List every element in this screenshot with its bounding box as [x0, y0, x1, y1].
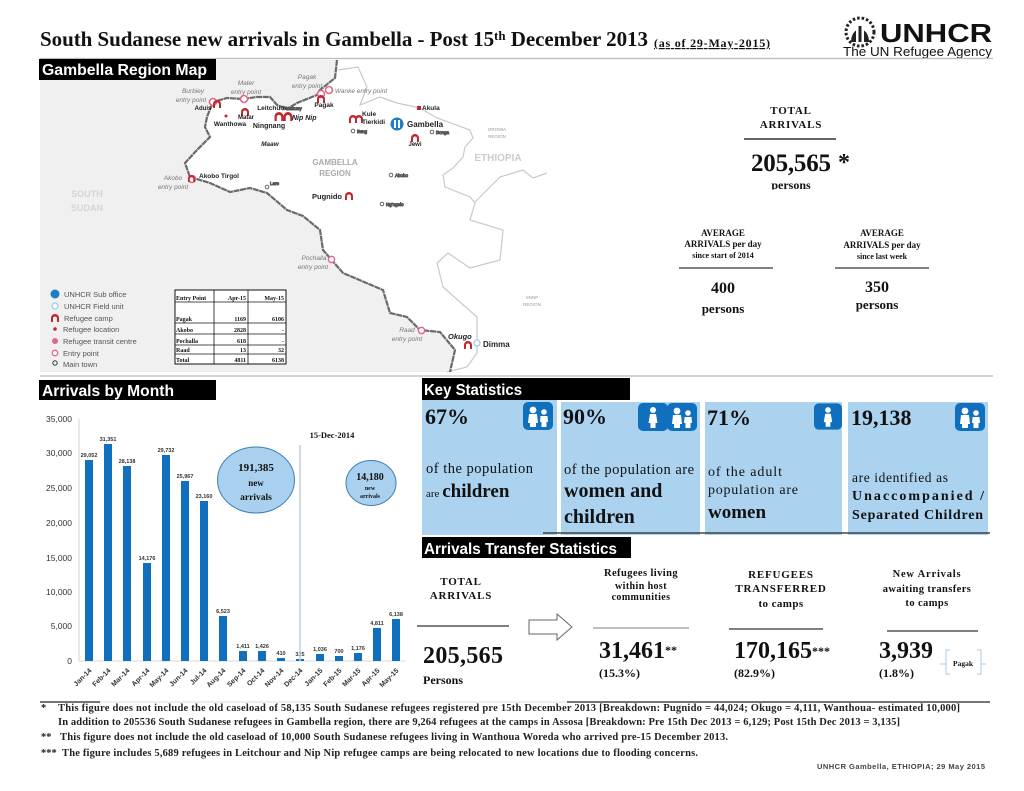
month labels: Apr-15	[361, 667, 381, 688]
panel: total arrivals summary: TOTAL	[770, 105, 812, 117]
chart axis: 35,000	[46, 414, 72, 424]
legend: Main town	[63, 360, 97, 369]
panel: average arrivals since last week: AVERAGE	[860, 228, 904, 238]
table: entry point arrivals: Entry Point	[176, 296, 206, 302]
month labels: Dec-14	[283, 667, 304, 689]
footnotes: This figure does not include the old caseload of 10,000 South Sudanese refugees living in Wanthoua Woreda who arrived pre-15 December 2013.	[60, 732, 728, 743]
month labels: Mar-14	[110, 667, 131, 688]
month labels: Mar-15	[341, 667, 362, 688]
map: Ethiopia regional borders	[338, 67, 547, 372]
panel: refugees in host communities: within host	[615, 581, 667, 592]
table: entry point arrivals: Akobo	[176, 328, 193, 334]
map: place labels: Akobo Tirgol	[199, 173, 239, 180]
map: region labels: REGION	[319, 169, 351, 178]
map: entry point labels: entry point	[392, 336, 423, 343]
data labels: 25,967	[177, 474, 193, 480]
footer credit: UNHCR Gambella, ETHIOPIA; 29 May 2015	[817, 762, 985, 771]
callout: 14,180 new arrivals: arrivals	[360, 494, 381, 500]
panel: 67% children: 67%	[425, 404, 469, 429]
icon: children	[523, 402, 553, 430]
map: town markers: Abobo	[395, 173, 409, 178]
map: international border	[185, 60, 455, 372]
month labels: May-14	[149, 667, 170, 689]
map: town markers	[265, 106, 450, 207]
chart axis: 0	[67, 656, 72, 666]
map: place labels: Maaw	[261, 141, 280, 148]
panel: 19,138 unaccompanied: Unaccompanied /	[852, 489, 985, 504]
panel: refugees in host communities: 31,461	[599, 638, 665, 664]
map: entry point labels: Pagak	[298, 74, 317, 81]
map: place labels: Akula	[422, 105, 440, 112]
panel: total arrivals summary: 205,565	[751, 150, 831, 177]
panel: refugees transferred: to camps	[758, 598, 804, 610]
title: December 2013	[506, 27, 648, 51]
month labels: Jan-14	[73, 667, 93, 688]
panel: refugees transferred: (82.9%)	[734, 666, 775, 680]
data labels: 1,411	[236, 644, 250, 650]
title: th	[494, 28, 506, 43]
table: entry point arrivals: -	[282, 328, 284, 334]
panel: total arrivals summary: *	[838, 150, 850, 176]
callout: 14,180 new arrivals: 14,180	[356, 472, 384, 483]
map: region labels: SNNP	[526, 295, 538, 300]
heading: Key Statistics	[422, 378, 630, 400]
table: entry point arrivals: 618	[237, 339, 246, 345]
data labels: 700	[334, 649, 344, 655]
panel: refugees in host communities: (15.3%)	[599, 666, 640, 680]
legend: Refugee transit centre	[63, 337, 137, 346]
map: region labels: ETHIOPIA	[474, 153, 522, 164]
month labels: Feb-14	[92, 667, 112, 688]
data labels: 4,811	[370, 621, 384, 627]
panel: average arrivals since start of 2014: ARRIVALS per day	[684, 239, 762, 249]
legend: UNHCR Sub office	[64, 290, 126, 299]
panel: 90% women and children	[561, 402, 700, 535]
table: entry point arrivals: 1169	[234, 317, 246, 323]
map: place labels: Aduis	[195, 106, 212, 112]
month labels: Jun-14	[169, 667, 189, 688]
bars	[85, 444, 400, 661]
map: entry point labels: Mater	[238, 80, 255, 87]
table: entry point arrivals: 13	[240, 348, 246, 354]
panel: average arrivals since last week	[835, 228, 929, 312]
month labels: Sep-14	[226, 667, 247, 689]
panel: refugees transferred: 170,165	[734, 638, 812, 664]
panel: total arrivals transfer: 205,565	[423, 643, 503, 669]
month labels: Apr-14	[131, 667, 151, 688]
panel: 67% children: are children	[426, 481, 510, 502]
panel: new arrivals awaiting transfers	[879, 569, 986, 680]
data labels: 14,176	[139, 556, 155, 562]
map: entry point markers	[188, 86, 425, 334]
panel: 71% women: women	[708, 502, 766, 523]
panel: total arrivals transfer	[417, 576, 509, 687]
map: refugee camp markers	[188, 95, 472, 349]
title: (as of 29-May-2015)	[654, 36, 770, 50]
chart axis: 10,000	[46, 587, 72, 597]
table: entry point arrivals: 32	[278, 348, 284, 354]
icon: woman and children	[638, 403, 697, 431]
map: entry point labels: entry point	[176, 97, 207, 104]
map: entry point labels: entry point	[231, 89, 262, 96]
data labels: 29,732	[158, 448, 174, 454]
map: entry point labels: Raad	[399, 327, 415, 334]
panel: average arrivals since start of 2014	[679, 228, 773, 316]
month labels: Jan-15	[304, 667, 324, 688]
panel: 90% women and children: women and	[564, 480, 662, 502]
month labels: Feb-15	[323, 667, 343, 688]
map: region labels	[71, 127, 541, 307]
logo: UNHCR: UNHCR	[880, 20, 992, 48]
panel: 71% women: 71%	[707, 405, 751, 430]
logo: UNHCR: The UN Refugee Agency	[843, 45, 993, 59]
logo: UNHCR	[843, 18, 993, 59]
panel: refugees transferred	[729, 569, 830, 680]
table: entry point arrivals: 6106	[272, 317, 284, 323]
panel: refugees transferred: TRANSFERRED	[735, 583, 827, 595]
panel: average arrivals since start of 2014: since start of 2014	[692, 251, 754, 260]
panel: refugees in host communities: communities	[612, 592, 670, 603]
data labels: 23,160	[196, 494, 212, 500]
map: entry point labels: entry point	[292, 83, 323, 90]
month labels: Aug-14	[206, 667, 227, 689]
panel: average arrivals since last week: persons	[856, 297, 898, 312]
data labels: 6,138	[389, 612, 403, 618]
arrow	[529, 614, 572, 640]
map: place labels: Dimma	[483, 340, 510, 349]
footnotes: This figure does not include the old caseload of 58,135 South Sudanese refugees registered pre 15th December 2013 [Breakdown: Pugnido = 44,024; Okugo = 4,111, Wanthoua- estimated 10,000]	[58, 703, 960, 714]
callout: 191,385 new arrivals	[218, 447, 294, 513]
chart axis: 20,000	[46, 518, 72, 528]
data labels: 1,176	[351, 646, 365, 652]
map: region labels: GAMBELLA	[312, 158, 358, 167]
panel: new arrivals awaiting transfers: awaiting transfers	[883, 584, 971, 595]
map: entry point labels: Pochalla	[302, 255, 327, 262]
data labels: 1,426	[255, 644, 269, 650]
table: entry point arrivals: -	[282, 339, 284, 345]
legend: UNHCR Field unit	[64, 302, 125, 311]
map: place labels: Pugnido	[312, 192, 342, 201]
callout: 14,180 new arrivals	[346, 460, 396, 506]
panel: 71% women	[705, 402, 842, 535]
map: entry point labels: Burbiey	[182, 88, 205, 95]
panel: total arrivals transfer: TOTAL	[440, 576, 482, 588]
map: region labels: REGION	[488, 134, 506, 139]
panel: refugees transferred: ***	[812, 644, 830, 658]
panel: new arrivals awaiting transfers: to camps	[905, 598, 949, 609]
panel: average arrivals since start of 2014: persons	[702, 301, 744, 316]
footnotes	[41, 703, 960, 759]
map: entry point labels	[158, 74, 423, 343]
map: place labels: Gambella	[407, 120, 444, 129]
map: region labels: OROMIA	[488, 127, 506, 132]
map: place labels: Matar	[238, 115, 255, 121]
table: entry point arrivals: Apr-15	[228, 296, 246, 302]
icon: Gambella sub office	[390, 118, 404, 130]
table: entry point arrivals: 6138	[272, 358, 284, 364]
map: place labels: Wanthowa	[214, 121, 247, 128]
map: South Sudan territory	[40, 60, 455, 372]
panel: new arrivals awaiting transfers: (1.8%)	[879, 666, 914, 680]
table: entry point arrivals: May-15	[264, 296, 284, 302]
panel: refugees in host communities: Refugees living	[604, 568, 678, 579]
heading: Arrivals by Month	[39, 380, 216, 400]
panel: new arrivals awaiting transfers: 3,939	[879, 638, 933, 664]
data labels	[81, 437, 403, 658]
panel: total arrivals summary	[744, 105, 850, 194]
heading: Gambella Region Map: Gambella Region Map	[42, 62, 207, 79]
footnotes: The figure includes 5,689 refugees in Leitchour and Nip Nip refugee camps are being relocated to new locations due to flooding concerns.	[62, 748, 698, 759]
chart axis: 15,000	[46, 553, 72, 563]
panel: average arrivals since last week: 350	[865, 279, 889, 296]
panel: 90% women and children: 90%	[563, 404, 607, 429]
callout: 191,385 new arrivals: 191,385	[238, 462, 274, 474]
map: entry point labels: Akobo	[163, 175, 183, 182]
map: entry point labels: entry point	[298, 264, 329, 271]
map: region labels: SUDAN	[71, 203, 103, 213]
legend: Entry point	[63, 349, 100, 358]
map: place labels: Nip Nip	[292, 115, 317, 122]
month labels: Jul-14	[189, 667, 208, 687]
table: entry point arrivals: Raad	[176, 348, 190, 354]
map: place labels: Leitchuor	[257, 105, 287, 112]
map: place labels: Ningnang	[253, 123, 285, 130]
month labels: Oct-14	[246, 667, 266, 688]
legend	[50, 290, 137, 369]
table: entry point arrivals: Total	[176, 358, 189, 364]
panel: new arrivals awaiting transfers: New Arrivals	[893, 569, 961, 580]
panel: 67% children	[422, 400, 557, 535]
panel: total arrivals summary: persons	[771, 178, 811, 192]
month labels: Nov-14	[264, 667, 285, 689]
table: entry point arrivals: Pagak	[176, 317, 193, 323]
chart axis: 25,000	[46, 483, 72, 493]
month labels	[73, 667, 400, 689]
chart axis: 30,000	[46, 448, 72, 458]
panel: 90% women and children: of the population are	[564, 462, 694, 478]
heading: Key Statistics: Key Statistics	[424, 382, 522, 399]
chart axis: 5,000	[51, 621, 72, 631]
panel: total arrivals transfer: Persons	[423, 673, 463, 687]
panel: 71% women: of the adult	[708, 465, 782, 480]
panel: Gambella region map	[40, 60, 547, 372]
month labels: May-15	[379, 667, 400, 689]
data labels: 1,036	[313, 647, 327, 653]
panel: refugees in host communities: **	[665, 643, 677, 657]
chart axis	[46, 414, 406, 666]
table: entry point arrivals: 4811	[234, 358, 246, 364]
panel: average arrivals since last week: since last week	[857, 252, 908, 261]
panel: 19,138 unaccompanied: Separated Children	[852, 508, 983, 523]
map: place labels: Pagak	[314, 102, 334, 109]
title	[40, 27, 770, 51]
table: entry point arrivals	[175, 290, 286, 364]
map: region labels: REGION	[523, 302, 541, 307]
data labels: 31,351	[100, 437, 116, 443]
footnotes: *	[41, 703, 46, 714]
map: place labels	[195, 102, 510, 349]
panel: average arrivals since start of 2014: AVERAGE	[701, 228, 745, 238]
panel: 19,138 unaccompanied: are identified as	[852, 470, 948, 485]
map: place labels: Okugo	[448, 332, 472, 341]
map: place labels: Kule	[362, 111, 376, 118]
icon: Dimma field unit	[474, 340, 480, 346]
divider: 15-Dec-2014: 15-Dec-2014	[310, 430, 355, 440]
panel: total arrivals summary: ARRIVALS	[760, 119, 822, 131]
data labels: 28,138	[119, 459, 135, 465]
map: region labels: SOUTH	[71, 189, 103, 199]
panel: 71% women: population are	[708, 483, 798, 498]
panel: 19,138 unaccompanied	[848, 402, 988, 535]
data labels: 325	[295, 652, 305, 658]
callout: 191,385 new arrivals: arrivals	[240, 493, 272, 503]
icon: children	[955, 403, 985, 431]
panel: 67% children: of the population	[426, 461, 534, 477]
panel: 19,138 unaccompanied: 19,138	[851, 405, 912, 430]
data labels: 29,052	[81, 453, 97, 459]
callout: Pagah bracket: Pagak	[953, 659, 974, 668]
callout: 191,385 new arrivals: new	[248, 478, 264, 488]
panel: 90% women and children: children	[564, 506, 635, 528]
map: entry point labels: Wanke entry point	[335, 88, 388, 95]
map: town markers: Itang	[357, 129, 368, 134]
title: South Sudanese new arrivals in Gambella - Post 15	[40, 27, 494, 51]
footnotes: ***	[41, 748, 57, 759]
legend: Refugee camp	[64, 314, 113, 323]
bar chart: arrivals by month	[46, 414, 406, 689]
map: town markers: Lare	[270, 181, 280, 186]
icon: woman	[814, 403, 842, 430]
heading: Arrivals by Month: Arrivals by Month	[42, 383, 174, 400]
table: entry point arrivals: Pochalla	[176, 339, 198, 345]
callout: 14,180 new arrivals: new	[365, 486, 376, 492]
footnotes: In addition to 205536 South Sudanese refugees in Gambella region, there are 9,264 refugees at the camps in Assosa [Breakdown: Pre 15th Dec 2013 = 6,129; Post 15th Dec 2013 = 3,135]	[58, 717, 900, 728]
table: entry point arrivals: 2828	[234, 328, 246, 334]
map: town markers: Ng'ngelo	[386, 202, 404, 207]
map: entry point labels: entry point	[158, 184, 189, 191]
map: town markers: Makuey	[286, 106, 303, 111]
panel: average arrivals since last week: ARRIVALS per day	[843, 240, 921, 250]
panel: refugees in host communities	[593, 568, 689, 680]
legend: Refugee location	[63, 325, 119, 334]
map: place labels: Tierkidi	[362, 119, 385, 126]
footnotes: **	[41, 732, 52, 743]
data labels: 6,523	[216, 609, 230, 615]
data labels: 410	[276, 651, 286, 657]
panel: total arrivals transfer: ARRIVALS	[430, 590, 492, 602]
panel: average arrivals since start of 2014: 400	[711, 280, 735, 297]
panel: refugees transferred: REFUGEES	[748, 569, 814, 581]
map: town markers: Bonga	[436, 130, 450, 135]
map: place labels: Jewi	[408, 142, 422, 148]
heading: Arrivals Transfer Statistics: Arrivals Transfer Statistics	[424, 541, 617, 558]
